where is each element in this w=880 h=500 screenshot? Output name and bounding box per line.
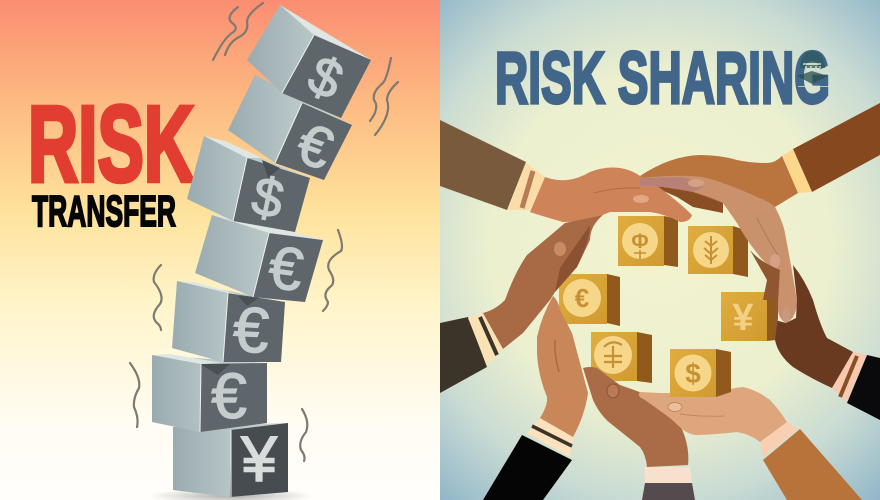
gold cube: wheat coin: [688, 226, 748, 277]
panel: risk transfer: [0, 0, 440, 500]
gold cube: dollar coin: [670, 349, 731, 397]
block: euro 2: [172, 281, 285, 367]
block: euro 4: [228, 75, 352, 183]
block: euro 1: €: [211, 360, 247, 432]
gold cube: euro coin: €: [575, 283, 589, 313]
panel: risk sharing: [440, 0, 880, 500]
block: yen: ¥: [240, 423, 277, 495]
block: euro 4: €: [289, 110, 341, 183]
block: dollar 1: $: [247, 166, 289, 230]
block: yen: [173, 423, 288, 497]
hand: left mid brown: [440, 215, 603, 393]
block: euro 2: €: [231, 293, 271, 367]
gold cube: euro coin: [559, 274, 620, 326]
hand: top right tan: [640, 103, 880, 213]
block: euro 3: [195, 215, 323, 304]
block: dollar 1: [187, 136, 310, 232]
wobble lines: [130, 3, 398, 461]
hand: top left orange: [440, 120, 692, 222]
gold cube: phi coin: [618, 216, 678, 267]
block: euro 1: [152, 354, 267, 432]
block: euro 3: €: [265, 233, 307, 304]
hand: right dark: [750, 250, 880, 420]
gold cube: currency coin: [591, 332, 652, 383]
logo overlay: [797, 51, 829, 87]
hand: lower right light: [640, 176, 797, 323]
subheading: TRANSFER: TRANSFER: [32, 187, 176, 236]
heading: RISK: RISK: [28, 83, 194, 204]
hand: bottom right light: [639, 387, 862, 500]
block: dollar 2: $: [300, 44, 352, 111]
tower shadow: [149, 488, 313, 500]
hand: bottom left upward: [483, 296, 588, 500]
gold cube: yen: [721, 292, 776, 341]
hand: bottom mid: [583, 367, 695, 500]
gold cube: phi coin: Φ: [631, 230, 649, 253]
gold cube: yen: ¥: [732, 297, 754, 339]
gold cube: dollar coin: $: [685, 358, 701, 389]
block: dollar 2: [247, 5, 371, 118]
